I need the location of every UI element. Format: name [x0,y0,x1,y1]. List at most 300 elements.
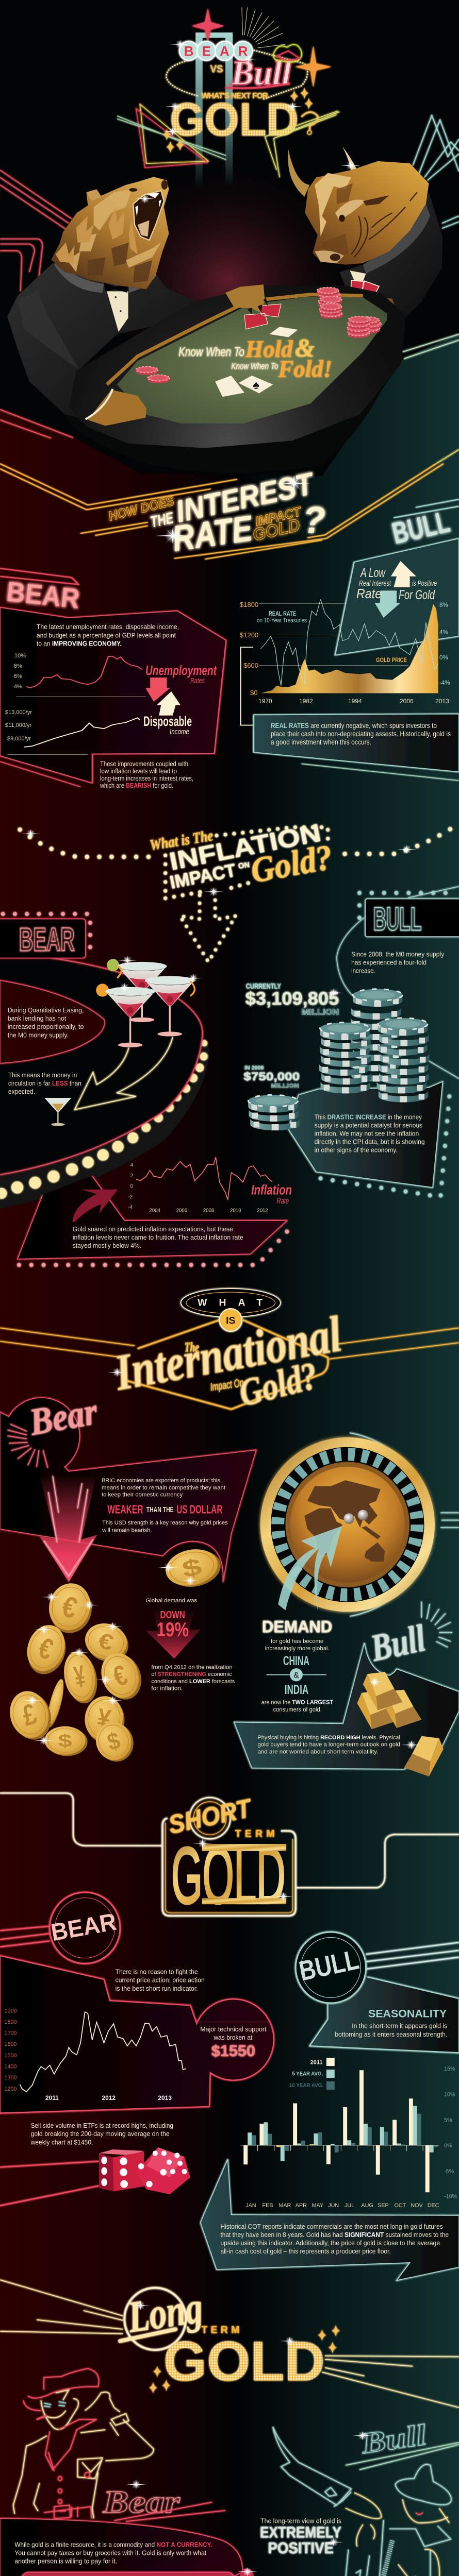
axis labels: 0 [130,1183,134,1189]
commodity panel [0,2518,242,2576]
circulation text: expected. [8,1088,35,1095]
price axis: 1900 [5,2008,17,2014]
left die pips [101,2157,128,2188]
down 19%: 19% [157,1619,189,1641]
GOLD letters [171,1831,286,1920]
gold axis: $0 [250,689,257,697]
VS: VS [210,63,223,75]
circulation text: This means the money in [8,1072,77,1079]
panel bulbs [19,1225,293,1265]
seasonal bars [241,2070,439,2192]
section title: IMPACT [254,504,304,529]
bear intro text: The latest unemployment rates, disposable income, [37,623,179,631]
neon pipes [0,1793,459,1916]
falling coins [5,1579,147,1766]
title neon lines [0,1320,459,1409]
month labels: FEB [263,2202,273,2209]
bear panel [0,1398,256,1582]
lips [416,2513,423,2515]
right stack [377,1018,430,1103]
real rates text: a good investment when this occurs. [271,738,371,746]
demand block: increasingly more global. [265,1646,330,1652]
M0 text [351,951,445,975]
down arrow [146,1607,201,1658]
fur highlights [68,189,161,272]
bull sign box [365,899,459,937]
gold stars [163,87,313,153]
falling coins: $ [105,1727,123,1756]
rear glass [117,962,167,1022]
bear rays [7,1424,48,1468]
price axis [5,2008,17,2092]
bear shirt [107,291,128,332]
red curve outline [0,958,203,1175]
section title: ? [303,500,325,541]
support callout: was broken at [213,2034,253,2041]
neon Bear script: Bear [103,2485,181,2520]
circulation text: circulation is far LESS than [8,1080,81,1087]
bear figure [7,177,194,420]
falling coins: $ [58,1731,72,1751]
label: Rate [276,1197,289,1206]
price axis: 1700 [5,2030,17,2036]
neon arc and lines [350,1433,459,1616]
bearish conclusion [100,760,193,789]
year axis: 1982 [299,698,313,705]
small stack [248,1095,300,1130]
eyes and cigarette [44,2402,66,2407]
current figure [245,982,339,1017]
down 19%: DOWN [160,1609,185,1621]
down 19% [157,1609,189,1641]
bull suit [339,192,442,318]
price years: 2012 [102,2094,116,2102]
right die pips [138,2150,187,2188]
panel text [116,1969,205,1992]
neon cowboy [13,2368,154,2518]
face up cards [215,327,298,397]
low rate label [356,566,437,602]
weaker headline: WEAKER [107,1502,143,1516]
title badge [120,2283,206,2350]
lime garnish [107,959,119,971]
axis labels: 2006 [176,1208,187,1214]
real rates text: REAL RATES are currently negative, which spurs investors to [271,721,437,730]
demand block: DEMAND [262,1618,332,1636]
left die front [113,2151,144,2192]
chart labels: on 10-Year Treasuries [257,617,307,624]
chart baselines [7,697,146,754]
BEAR circles: B [184,43,194,59]
bull neon lines [366,1942,459,1969]
maroon ellipse panel [0,980,104,1063]
bear upper paw [225,284,265,312]
muzzle [315,250,344,263]
red down arrow [145,677,170,702]
price years: 2011 [45,2094,59,2102]
face [402,2499,449,2523]
front glass [105,987,155,1047]
unemployment axis: 6% [14,673,22,680]
bear box bulbs [3,914,90,952]
real rates text [271,721,451,746]
title badge: Long [124,2283,206,2342]
low rate label: Real Interest [359,579,391,588]
right bulbs [316,1096,449,1197]
line [136,1157,272,1200]
table slogan: Know When To [231,361,278,371]
support callout [196,2022,271,2060]
BEAR circles: R [238,43,248,59]
bearish conclusion: long-term increases in interest rates, [100,775,193,782]
section title: THE [149,509,175,531]
cigarette [37,2416,47,2419]
bull box bulbs [359,893,448,929]
TERM: TERM [202,2324,239,2335]
circulation text [8,1072,81,1095]
seasonality text: In the short-term it appears gold is [352,2023,447,2030]
demand block: for gold has become [271,1638,323,1645]
chart labels [257,610,407,664]
bear intro text: to an IMPROVING ECONOMY. [37,640,122,647]
title neon lines [0,464,444,559]
demand arrow [278,1526,342,1611]
poker table [69,284,405,448]
commodity text [14,2541,212,2565]
seasonal axis: 0% [444,2143,452,2149]
table base [63,285,405,473]
support callout: Major technical support [200,2026,267,2033]
price axis: 1300 [5,2075,17,2081]
falling coins: ¥ [72,1658,88,1695]
seasonality text [335,2008,447,2038]
low rate label: For Gold [399,588,435,602]
disposable label: Disposable [143,714,192,729]
month labels: JUN [328,2202,339,2209]
section title [107,466,325,559]
cabinet [21,2572,235,2576]
seasonality text: bottoming as it enters seasonal strength. [335,2031,447,2038]
table slogan [178,333,332,382]
BEAR heading: BEAR [5,576,81,615]
unemployment axis: 8% [14,663,22,669]
muscle lines [351,192,417,257]
falling coins: € [96,1628,116,1655]
tongue [138,221,149,236]
axis labels [128,1163,268,1214]
seasonal axis: -5% [444,2168,454,2175]
stars [192,8,332,87]
seasonal axis [444,2066,457,2200]
neon sign [117,7,339,187]
low rate label: Rate [356,586,382,601]
pink chips [136,287,382,383]
GOLD bulbs: GOLD [163,2330,325,2392]
table slogan: Hold [245,336,293,363]
support line [19,2049,209,2050]
slot machine [21,2568,254,2576]
unemployment line [26,656,142,688]
left die side [99,2153,113,2192]
sparkles [155,475,312,544]
QE text: bank lending has not [8,1015,67,1022]
neon under line [302,764,459,781]
year axis: 1970 [258,698,272,705]
falling coins: £ [19,1697,40,1732]
drastic text: supply is a potential catalyst for serious [315,1122,422,1129]
sparkles [22,1367,421,1750]
income axis: $11,000/yr [5,722,32,728]
drastic panel [288,1081,442,1188]
scarf [45,2419,96,2471]
wheel black [271,1447,424,1602]
eye [129,188,137,192]
bull banner lines [394,499,459,518]
positive block: The long-term view of gold is [260,2517,341,2525]
shirt [350,270,366,281]
BRIC text: means in order to remain competitive they want [102,1485,226,1491]
month labels: OCT [395,2202,406,2209]
income axis: $9,000/yr [7,736,31,742]
horns [288,149,310,197]
price line [20,2012,186,2092]
cards [244,304,281,329]
buttons [58,2472,90,2504]
title bulbs [20,827,451,962]
spade: ♠ [253,378,259,392]
roulette wheel [260,1437,435,1612]
teeth [135,193,161,217]
title text: Gold? [248,837,335,890]
collar [363,204,430,274]
bear badge [49,1892,120,1963]
gold axis: $600 [243,662,258,669]
section title: GOLD [251,515,302,545]
legend: 2011 [310,2060,323,2066]
M0 text: has experienced a four-fold [351,959,427,967]
fringe [381,2540,410,2576]
current figure: MILLION [302,1008,339,1017]
sparkles [41,2301,372,2576]
weaker headline: US DOLLAR [176,1502,223,1516]
axis labels: 2004 [149,1208,161,1214]
commodity text: You cannot pay taxes or buy groceries with it. Gold is only worth what [14,2549,207,2557]
BEAR circles: E [202,43,211,59]
chart labels: REAL RATE [269,610,296,617]
title text: ON [238,861,250,871]
bull rays [421,1601,452,1647]
inflation text: stayed mostly below 4%. [73,1242,141,1249]
gold trim [107,295,363,384]
bull hands [341,293,398,317]
chart grid [259,603,408,665]
real rate line [260,599,438,686]
rate axis [439,602,450,686]
bull dark modelling [322,183,353,255]
unemployment label: Unemployment [145,663,217,678]
body [13,2392,154,2518]
QE text: increased proportionally, to [8,1023,84,1030]
year axis: 1994 [348,698,362,705]
support callout: $1550 [211,2042,255,2060]
month labels: JUL [345,2202,354,2209]
month labels: NOV [411,2202,423,2209]
left die [99,2149,144,2156]
stars [149,2325,340,2394]
drastic text: This DRASTIC INCREASE in the money [315,1113,422,1121]
sparkles [21,829,417,997]
neon rays [0,2280,459,2408]
rim [69,285,405,448]
swoosh arrow [73,1190,118,1222]
physical buying text: gold buyers tend to have a longer-term outlook on gold [257,1742,400,1748]
bulb loop [166,49,307,99]
seasonal axis: 15% [444,2066,455,2072]
drastic text: in other signs of the economy. [315,1147,398,1154]
2008 figure: MILLION [271,1083,299,1089]
GOLD bulbs: GOLD [170,93,299,146]
back stack [350,989,402,1081]
rate axis: 4% [439,630,448,636]
legend [289,2058,335,2090]
inflation chart [128,1157,292,1214]
hat [23,2368,99,2411]
hero black backdrop [0,0,459,476]
chart labels: GOLD PRICE [376,656,407,664]
panel text: is the best short run indicator. [116,1985,198,1992]
neon line [0,761,80,787]
physical buying text: and are not worried about short-term volatility. [257,1749,378,1755]
neon cowgirl [273,2427,451,2576]
physical buying text: Physical buying is hitting RECORD HIGH levels. Physical [257,1735,400,1741]
GOLD letters: GOLD [171,1831,285,1920]
axis labels: 2012 [257,1208,268,1214]
month labels [245,2202,439,2209]
M0 text: Since 2008, the M0 money supply [351,951,445,958]
label [251,1182,292,1206]
disposable label [143,714,192,736]
maroon spotlight [88,151,369,411]
bearish conclusion: These improvements coupled with [100,760,188,768]
falling coins: € [109,1658,132,1693]
curved band [0,1031,209,1209]
low rate label: is Positive [412,579,437,588]
axis labels: 2010 [230,1208,241,1214]
unemployment axis: 10% [14,653,26,659]
rate axis: 8% [439,602,448,608]
face [41,2390,78,2429]
dice [99,2147,190,2194]
seasonal axis: 10% [444,2092,455,2098]
q4 text: of STRENGTHENING economic [151,1671,232,1677]
bracket [241,647,253,725]
current figure: CURRENTLY [246,982,281,991]
rate axis: -4% [439,680,450,686]
unemployment axis [14,653,26,690]
gold axis [240,601,258,697]
axis labels: 2008 [203,1208,214,1214]
title text: The [185,1340,199,1354]
title text [149,819,335,893]
sparkles [163,40,303,137]
right glass [145,976,194,1037]
bull head and hump [305,161,429,265]
short term section [0,1793,459,2280]
boot [322,2550,369,2576]
drastic text [315,1113,425,1154]
seasonal axis: 5% [444,2117,452,2124]
COT panel [201,2159,459,2280]
bear head [51,177,169,289]
title text: IMPACT [168,860,238,893]
sell side text: gold breaking the 200-day moving average on the [31,2130,170,2138]
cream up arrow [391,561,416,587]
price axis: 1400 [5,2064,17,2070]
bow tie [104,282,128,293]
dollar coin [162,1544,224,1592]
second ball [358,1510,368,1520]
dollar coin: $ [180,1553,204,1583]
small martini [44,1098,71,1126]
knife [273,2427,351,2506]
international section [0,1289,459,1776]
cream up arrow [157,691,181,716]
bearish conclusion: low inflation levels will lead to [100,768,177,775]
positive block: POSITIVE [268,2539,334,2557]
shoulder highlight [18,291,79,370]
QE text: During Quantitative Easing, [8,1007,84,1014]
q4 text: conditions and LOWER forecasts [151,1679,235,1685]
positive block: EXTREMELY [260,2523,341,2541]
bear lower paw [88,390,146,426]
neon lines [114,2502,225,2521]
demand block: & [293,1671,299,1680]
demand block: are now the TWO LARGEST [261,1699,334,1706]
month labels: APR [296,2202,307,2209]
right die light face [146,2147,185,2178]
commodity text: While gold is a finite resource, it is a commodity and NOT A CURRENCY. [14,2541,212,2548]
axis labels: -2 [128,1194,133,1200]
disposable line [24,718,140,747]
table slogan: Fold! [277,355,332,382]
arm [346,2493,382,2547]
bear intro text [37,623,179,647]
sell side text: Sell side volume in ETFs is at record highs, including [31,2122,173,2129]
gold axis: $1800 [240,601,258,608]
hat [395,2464,451,2505]
price axis: 1600 [5,2041,17,2047]
belt [44,2505,91,2518]
shirt studs [114,296,122,312]
BRIC text: BRIC economies are exporters of products; this [102,1478,220,1484]
COT text: all-in cash cost of gold – this represents a producer price floor. [220,2248,391,2255]
positive block [260,2517,341,2557]
2008 figure: $750,000 [243,1070,300,1083]
weaker headline [107,1502,223,1516]
inner ring [285,1462,409,1587]
pocket [77,2458,103,2479]
legend: 5 YEAR AVG. [292,2071,323,2077]
claws [248,297,268,314]
bull panel [310,1977,459,2053]
title text: What is The [149,827,215,854]
seasonality text: SEASONALITY [368,2008,447,2020]
bear banner [0,568,78,584]
COT text: upside using this indicator. Additionally, the price of gold is close to the average [220,2240,440,2247]
jacket [378,2520,451,2576]
nose [161,180,168,190]
felt [117,297,387,423]
